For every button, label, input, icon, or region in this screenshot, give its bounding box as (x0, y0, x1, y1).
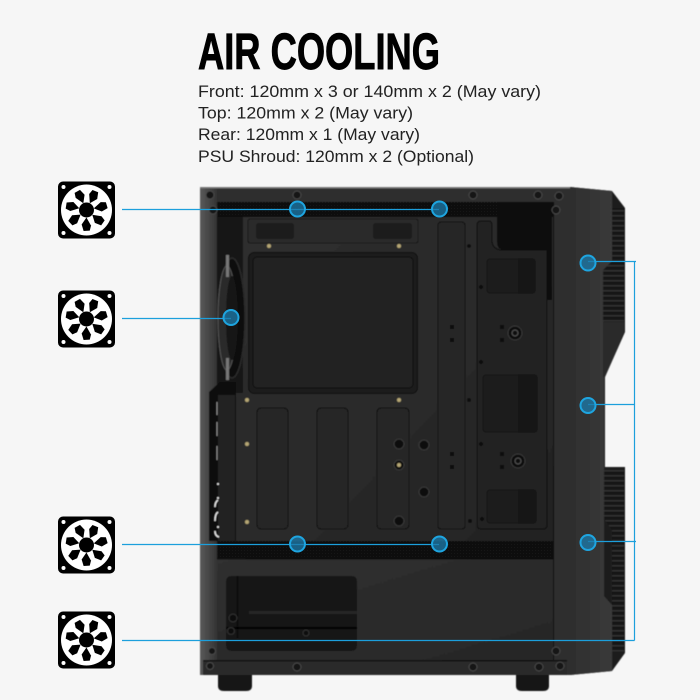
callout markers (224, 202, 596, 552)
PC case (200, 187, 625, 691)
bottom frame rail (203, 660, 567, 675)
icon: fan top (58, 182, 115, 238)
specification text block: PSU Shroud: 120mm x 2 (Optional) (198, 147, 474, 166)
specification text block: Top: 120mm x 2 (May vary) (198, 104, 413, 122)
main case frame (200, 187, 570, 675)
callout lines (122, 210, 636, 640)
motherboard tray (217, 202, 553, 558)
top bracket with slots (248, 219, 418, 243)
specification text block (198, 82, 541, 166)
bottom mesh vent (217, 541, 553, 559)
case screws (206, 191, 564, 671)
icon: fan shroud upper (58, 516, 115, 574)
title: AIR COOLING (198, 23, 440, 80)
icon: fan rear (58, 290, 115, 348)
upper right cable recess (497, 202, 552, 300)
icon: fan PSU shroud (58, 612, 115, 668)
standoffs (245, 244, 525, 526)
front panel with vents (570, 187, 625, 675)
CPU cutout (248, 252, 418, 394)
specification text block: Rear: 120mm x 1 (May vary) (198, 125, 420, 144)
vertical cable panels (438, 221, 547, 529)
PSU shroud (217, 558, 553, 661)
rear fan (217, 217, 245, 393)
lower cable slots (257, 408, 409, 529)
top fan mount strip (217, 202, 553, 217)
case feet (218, 674, 549, 691)
rectangular tray cutouts (483, 259, 537, 523)
rear IO slots (209, 382, 236, 541)
specification text block: Front: 120mm x 3 or 140mm x 2 (May vary) (198, 82, 541, 101)
mount holes (450, 244, 504, 523)
